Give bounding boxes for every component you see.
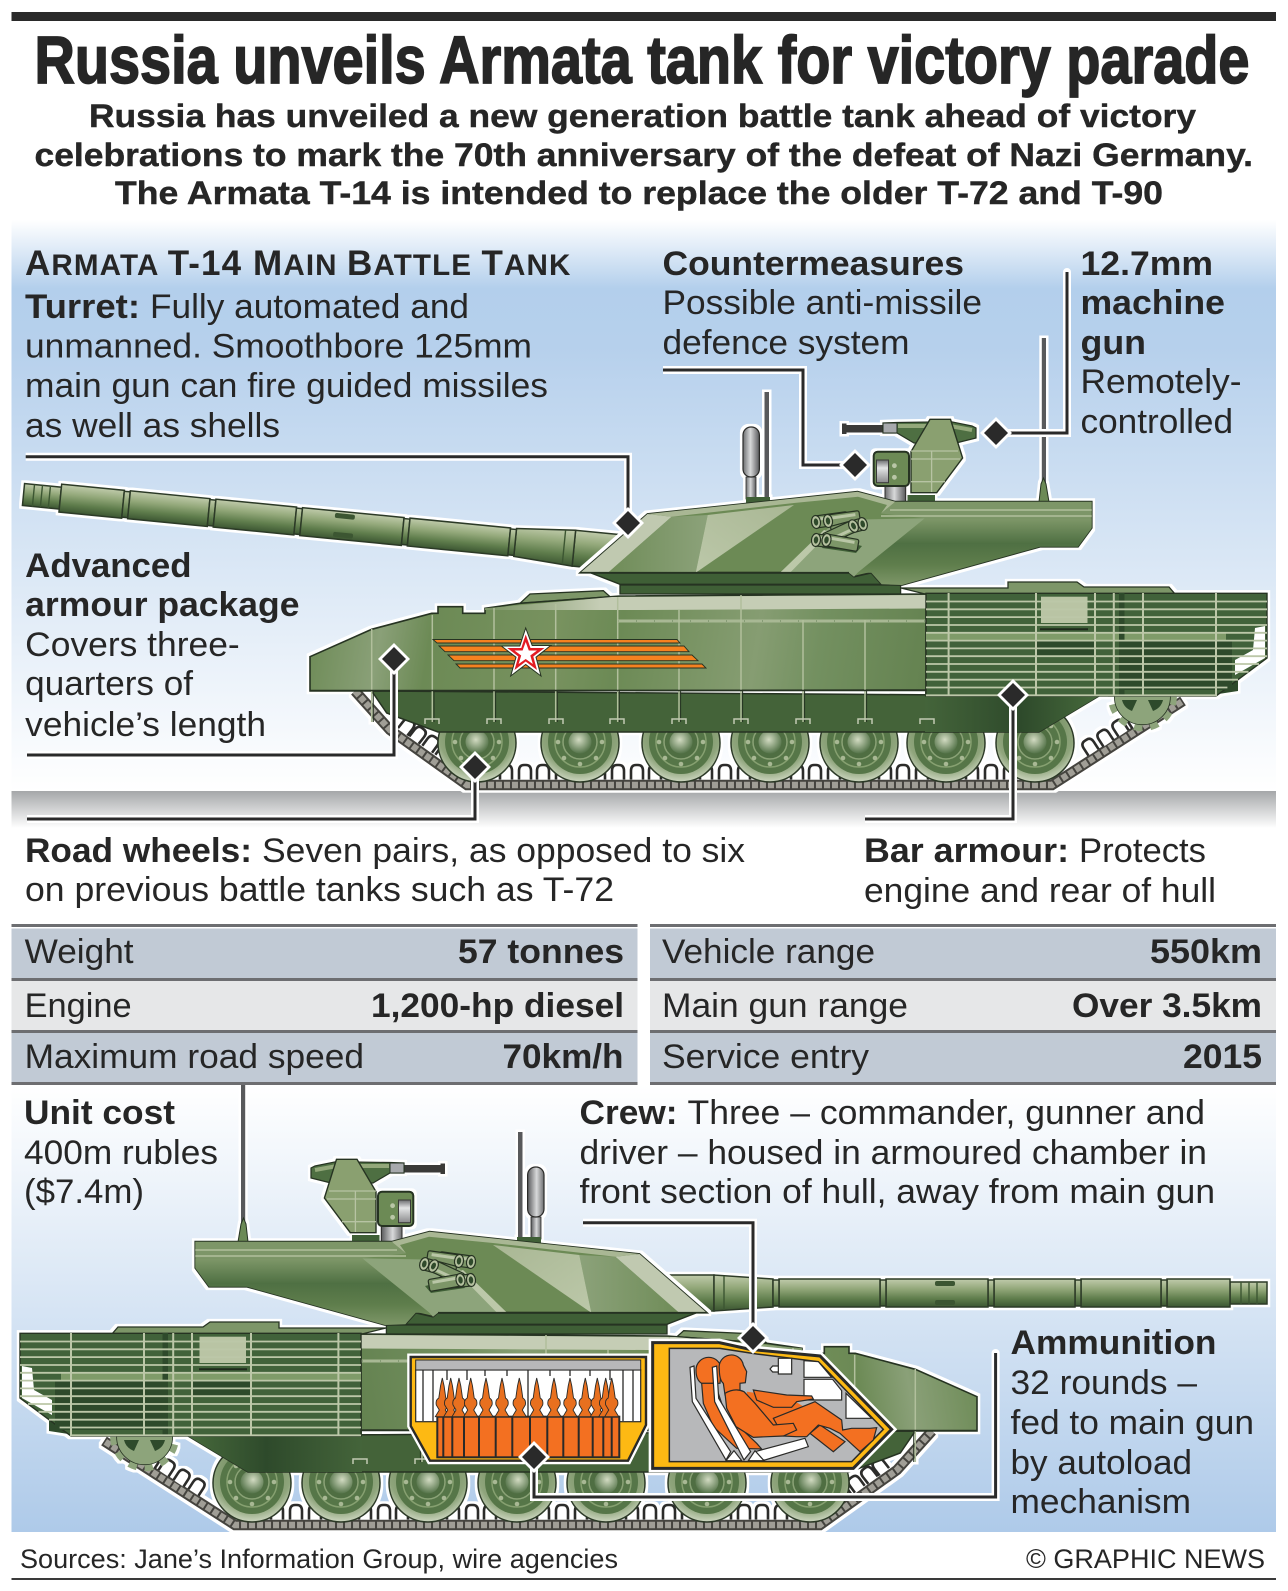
callout: ammunition (518, 1353, 996, 1497)
bar armour (926, 593, 1267, 696)
footer: credit: © GRAPHIC NEWS (1026, 1544, 1265, 1574)
crew compartment (653, 1343, 892, 1468)
upper hull (310, 582, 1175, 724)
table: right specifications: 2015 (1183, 1038, 1262, 1076)
lower hull (372, 676, 1238, 732)
text: crew: front section of hull, away from main gun (580, 1173, 1215, 1211)
table: right specifications (650, 924, 1276, 1085)
text: machine gun: gun (1080, 324, 1146, 362)
text: machine gun: machine (1080, 284, 1225, 322)
text: countermeasures: Countermeasures (662, 245, 964, 283)
text: advanced armour: quarters of (25, 665, 194, 703)
text: crew: driver – housed in armoured chamber in (580, 1134, 1207, 1172)
text: ammunition: Ammunition (1010, 1324, 1216, 1362)
text: turret: Turret: (25, 288, 140, 326)
tank cutaway view (20, 1078, 977, 1525)
text: road wheels: Road wheels: (25, 832, 252, 870)
remote weapon station (842, 419, 976, 502)
text: countermeasures (662, 245, 982, 362)
text: advanced armour: Advanced (25, 547, 192, 585)
text: crew (580, 1094, 1215, 1211)
text: turret: Fully automated and (150, 288, 469, 326)
text: advanced armour: vehicle’s length (25, 706, 266, 744)
turret (580, 492, 1092, 585)
text: machine gun: controlled (1080, 403, 1233, 441)
table: left specifications: 1,200-hp diesel (371, 987, 624, 1025)
callout: road wheels (27, 751, 491, 819)
cutaway view gun barrel (666, 1275, 1267, 1311)
track (355, 691, 1183, 785)
text: ammunition: by autoload (1010, 1444, 1192, 1482)
callout: turret (26, 457, 644, 539)
road wheels (438, 704, 1074, 782)
text: countermeasures: Possible anti-missile (662, 284, 982, 322)
bottom rule (12, 1578, 1276, 1580)
callout: countermeasures (663, 370, 871, 481)
text: turret: unmanned. Smoothbore 125mm (25, 328, 532, 366)
text: unit cost (24, 1094, 218, 1211)
text: advanced armour: armour package (25, 586, 299, 624)
table: left specifications: 70km/h (502, 1038, 624, 1076)
table: left specifications: Weight (25, 933, 134, 971)
table: right specifications: Main gun range (662, 987, 908, 1025)
text: turret: ARMATA T-14 MAIN BATTLE TANK (25, 244, 572, 283)
text: road wheels: Seven pairs, as opposed to six (262, 832, 745, 870)
text: ammunition: fed to main gun (1010, 1404, 1254, 1442)
panel: side view background (12, 220, 1276, 792)
antennas and periscope (743, 338, 1049, 503)
text: crew: Three – commander, gunner and (688, 1094, 1205, 1132)
table: right specifications: Service entry (662, 1038, 869, 1076)
text: ammunition (1010, 1324, 1254, 1521)
text: advanced armour (25, 547, 299, 744)
text: machine gun (1080, 245, 1242, 441)
text: bar armour (864, 832, 1216, 910)
smoke launchers (811, 510, 869, 553)
table: right specifications: Vehicle range (662, 933, 875, 971)
text: ammunition: 32 rounds – (1010, 1364, 1197, 1402)
text: unit cost: 400m rubles (24, 1134, 218, 1172)
side view gun barrel (22, 477, 623, 571)
text: unit cost: Unit cost (24, 1094, 175, 1132)
text: ammunition: mechanism (1010, 1483, 1191, 1521)
callout: crew (583, 1223, 769, 1354)
tank side view (310, 338, 1267, 785)
table: right specifications: Over 3.5km (1072, 987, 1262, 1025)
ammunition compartment (411, 1357, 646, 1461)
table: left specifications: Maximum road speed (25, 1038, 364, 1076)
text: turret (25, 244, 572, 445)
track teeth (398, 710, 1143, 780)
sprocket (1112, 667, 1172, 727)
callout: machine gun (980, 272, 1067, 449)
table: left specifications: 57 tonnes (458, 933, 624, 971)
text: unit cost: ($7.4m) (24, 1173, 144, 1211)
text: road wheels: on previous battle tanks such as T-72 (25, 871, 614, 909)
intro text: celebrations to mark the 70th anniversary of the defeat of Nazi Germany. (34, 137, 1253, 173)
footer: sources: Sources: Jane’s Information Group, wire agencies (20, 1544, 618, 1574)
text: countermeasures: defence system (662, 324, 910, 362)
text: bar armour: Bar armour: (864, 832, 1069, 870)
ground band (12, 791, 1276, 828)
panel: cutaway background (12, 1085, 1276, 1532)
intro text (34, 98, 1253, 211)
text: turret: main gun can fire guided missiles (25, 367, 548, 405)
top rule (12, 12, 1276, 21)
table: right specifications: 550km (1150, 933, 1262, 971)
table: left specifications: Engine (25, 987, 132, 1025)
text: bar armour: Protects (1079, 832, 1206, 870)
text: road wheels (25, 832, 745, 909)
text: turret: as well as shells (25, 407, 280, 445)
text: machine gun: Remotely- (1080, 363, 1242, 401)
red star and orange ribbon (433, 628, 706, 676)
text: advanced armour: Covers three- (25, 626, 240, 664)
callout: bar armour (865, 679, 1029, 819)
intro text: The Armata T-14 is intended to replace the older T-72 and T-90 (115, 175, 1163, 211)
callout lines and markers (26, 272, 1067, 1497)
text: machine gun: 12.7mm (1080, 245, 1213, 283)
table: left specifications (12, 924, 638, 1085)
intro text: Russia has unveiled a new generation battle tank ahead of victory (89, 98, 1196, 134)
text: bar armour: engine and rear of hull (864, 872, 1216, 910)
text: crew: Crew: (580, 1094, 678, 1132)
callout: advanced armour (27, 643, 410, 755)
